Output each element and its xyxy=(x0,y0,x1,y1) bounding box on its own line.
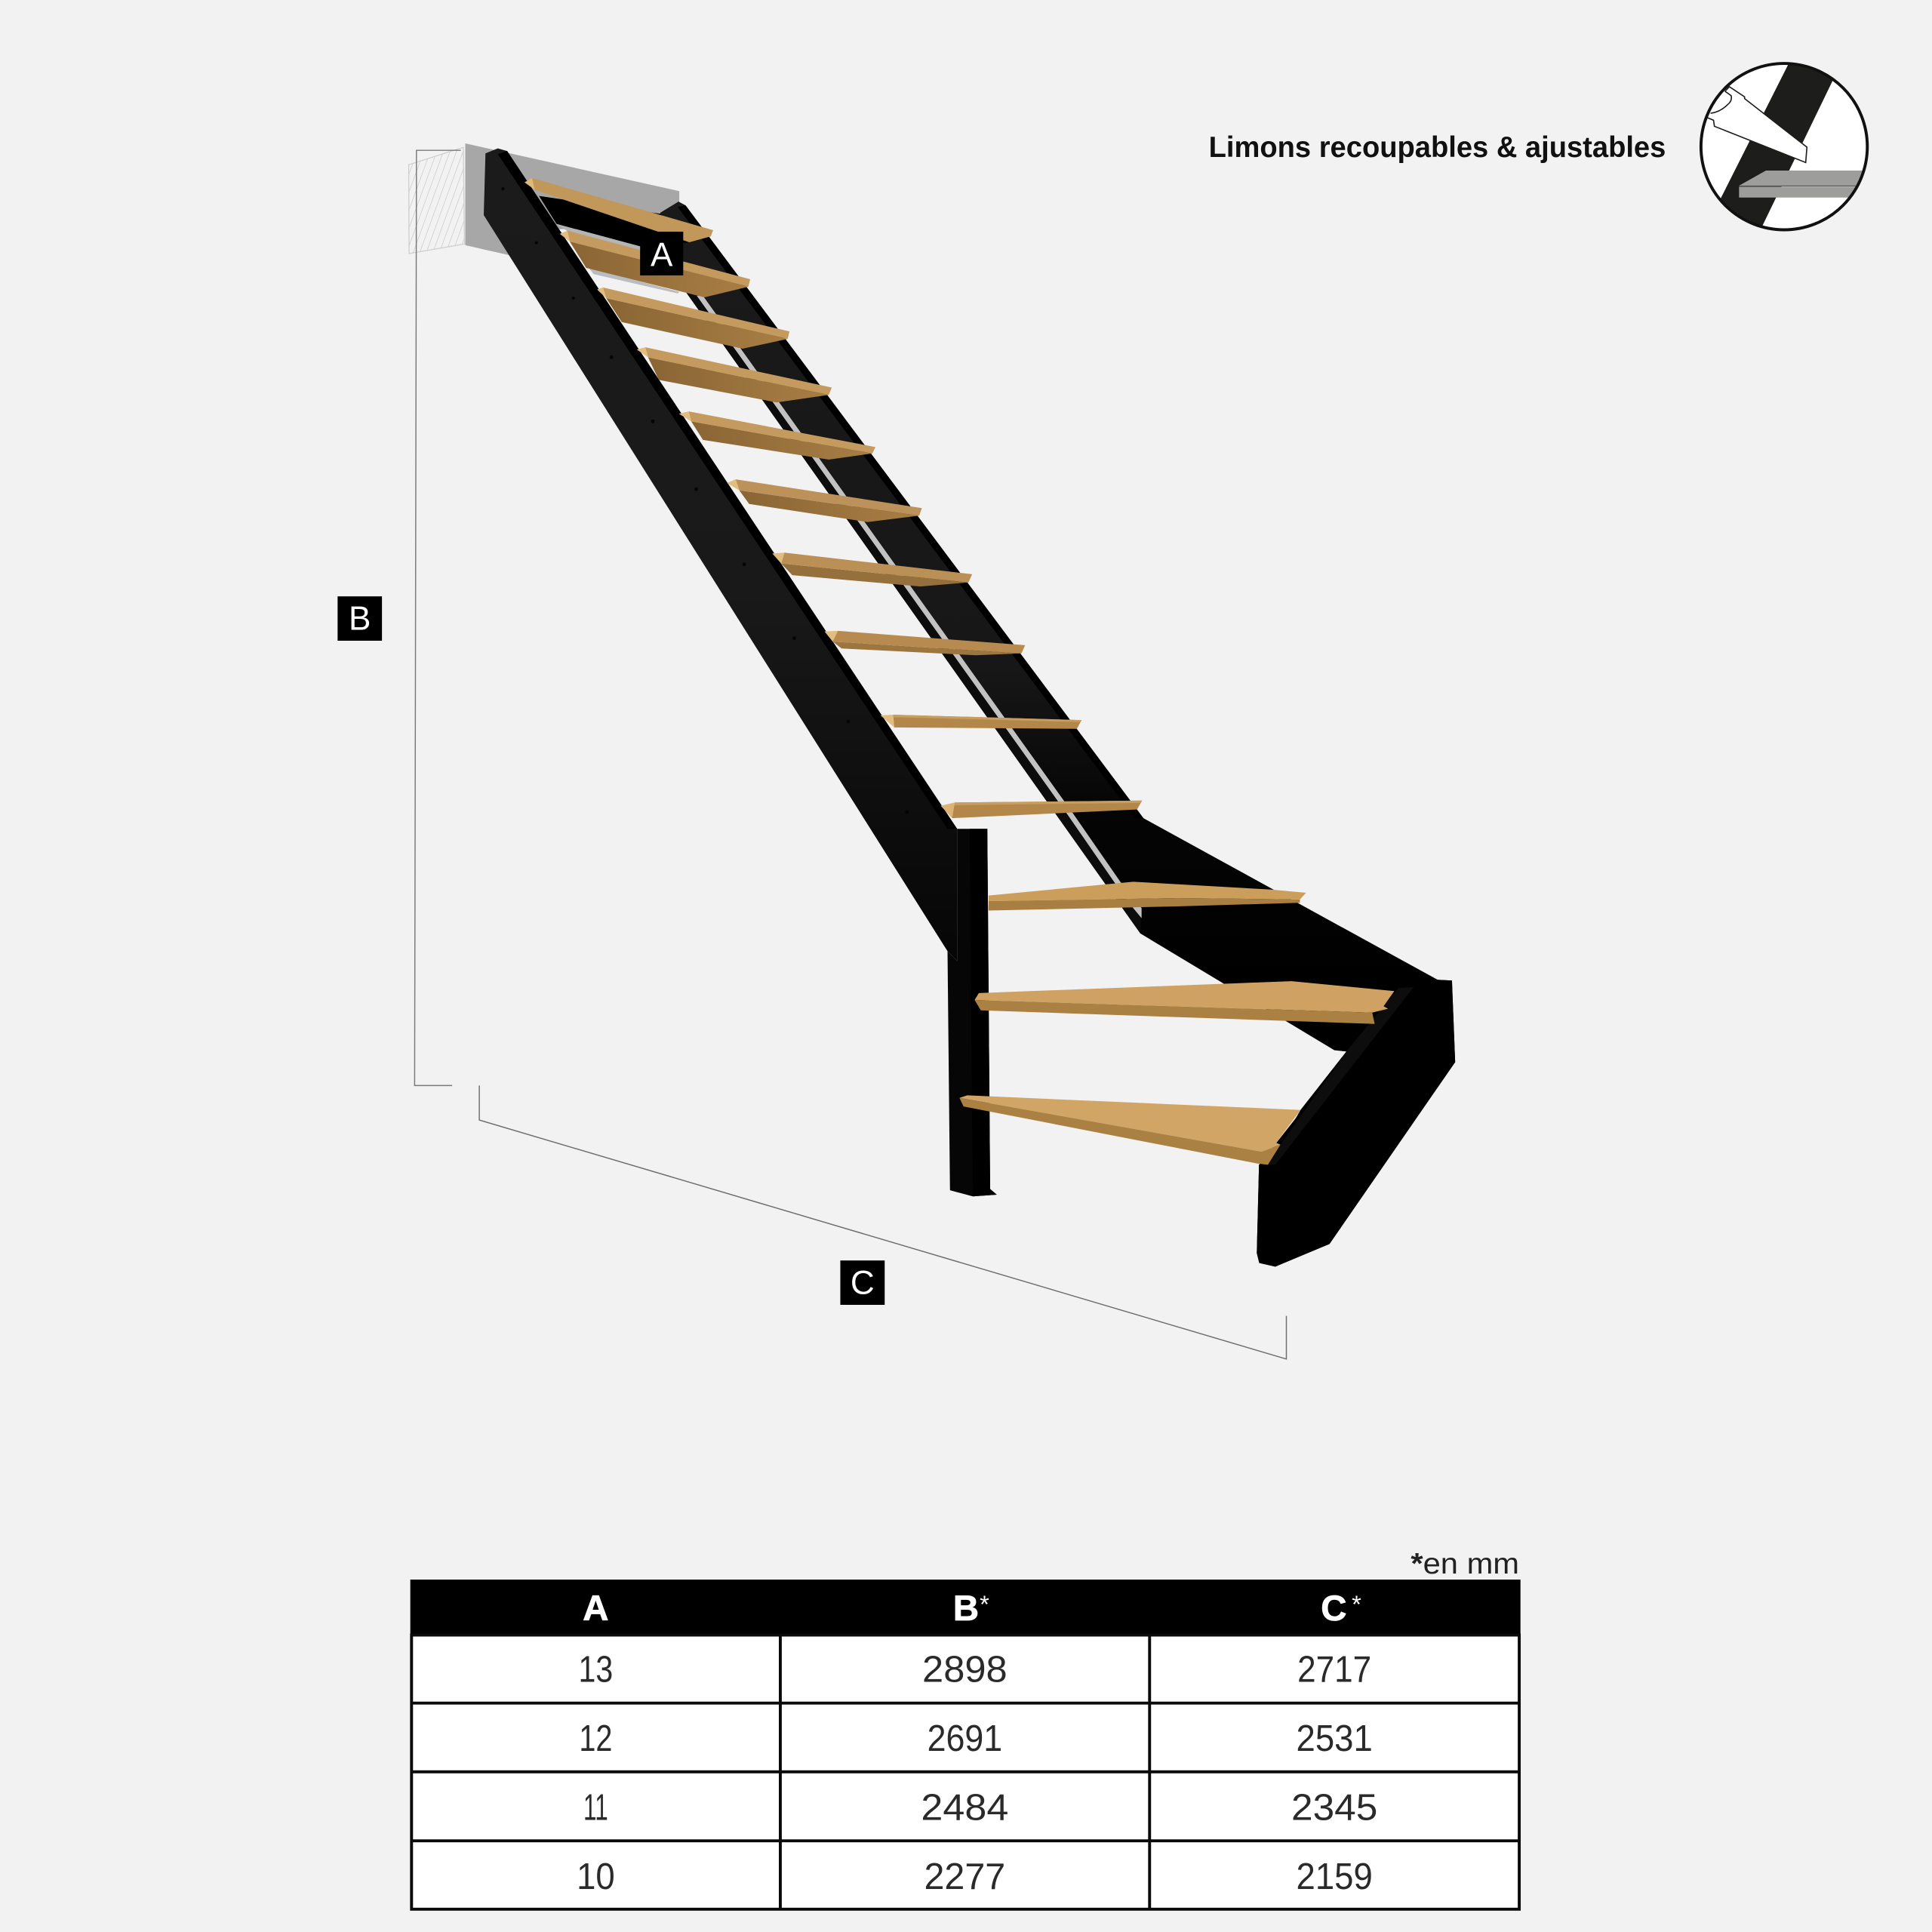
label A: A xyxy=(651,237,673,274)
tread 1 xyxy=(525,178,713,242)
table rows: 11 xyxy=(583,1787,608,1828)
table body xyxy=(411,1635,1519,1909)
grey wedge between rear panel and second tread xyxy=(556,224,640,254)
tread 13 xyxy=(959,1095,1300,1164)
label C: C xyxy=(851,1264,875,1301)
tread 2 xyxy=(560,231,750,297)
tread 5 xyxy=(679,411,875,460)
right stringer and lower winder panel xyxy=(650,202,1455,1266)
tread 7 xyxy=(772,552,972,586)
tread 6 xyxy=(727,479,922,522)
dimension B bracket xyxy=(414,150,461,1085)
table note: *en mm xyxy=(1411,1548,1519,1580)
infographic canvas xyxy=(337,62,1869,1911)
table rows: 2159 xyxy=(1297,1857,1373,1897)
wall anchor: hatched wall section xyxy=(409,147,465,254)
staircase xyxy=(484,149,1455,1266)
newel post xyxy=(948,829,997,1196)
tread 11 xyxy=(989,881,1306,911)
bolt holes xyxy=(501,187,909,814)
table grid xyxy=(411,1635,1521,1909)
table header: B xyxy=(953,1589,979,1629)
table header: C xyxy=(1321,1589,1346,1629)
tread 3 xyxy=(597,288,789,349)
label C xyxy=(840,1260,884,1305)
table rows: 2345 xyxy=(1291,1787,1377,1828)
dimensions table xyxy=(411,1580,1521,1909)
table rows: 2898 xyxy=(922,1650,1008,1690)
table header: * xyxy=(1352,1590,1361,1618)
table rows: 13 xyxy=(579,1650,613,1690)
table header: * xyxy=(980,1590,989,1618)
table rows: 10 xyxy=(577,1857,615,1897)
lighter edge band on winder panel xyxy=(1268,987,1414,1164)
silver strip along right stringer xyxy=(697,296,1142,918)
icon: cut stringer detail xyxy=(1700,62,1869,231)
table rows: 12 xyxy=(579,1718,612,1759)
tread 9 xyxy=(881,715,1081,729)
tread 8 xyxy=(825,631,1025,655)
tread 12 xyxy=(974,981,1395,1024)
grey strip below second tread xyxy=(589,268,679,294)
left stringer xyxy=(484,149,957,961)
table rows: 2691 xyxy=(928,1718,1002,1759)
table rows xyxy=(577,1650,1377,1897)
label B: B xyxy=(349,600,371,637)
tread 10 xyxy=(941,801,1142,818)
label A xyxy=(640,232,683,275)
dimension C bracket xyxy=(479,1085,1286,1359)
tread 4 xyxy=(637,347,832,402)
callout text: Limons recoupables & ajustables xyxy=(1209,131,1666,164)
table header: A xyxy=(583,1589,608,1629)
table rows: 2531 xyxy=(1297,1718,1373,1759)
label B xyxy=(337,596,382,641)
table header xyxy=(411,1580,1521,1635)
table rows: 2484 xyxy=(921,1787,1008,1828)
table rows: 2277 xyxy=(924,1857,1005,1897)
upper landing: grey wall block xyxy=(465,143,679,255)
table rows: 2717 xyxy=(1297,1650,1371,1690)
rear black panel under top tread xyxy=(539,196,690,247)
